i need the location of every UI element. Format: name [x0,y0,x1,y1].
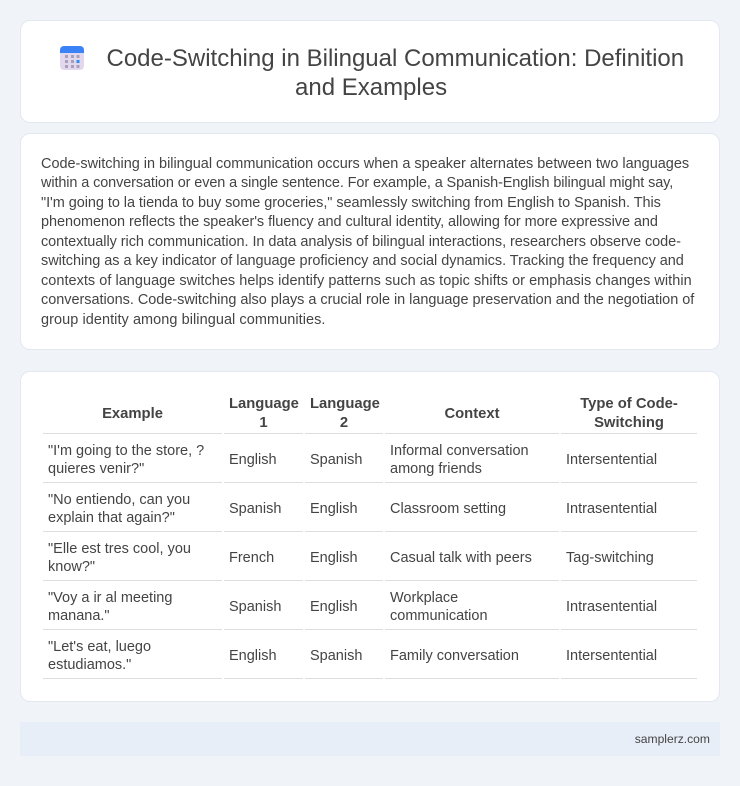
table: code-switching examples: "No entiendo, can you explain that again?" [48,492,190,526]
table: code-switching examples: "Elle est tres cool, you know?" [48,541,191,575]
panel: title card: and Examples [295,74,447,101]
panel: title card [20,20,720,123]
table: code-switching examples: Type of Code-Switching [580,396,678,431]
text block: description: Code-switching in bilingual communication occurs when a speaker alternates between two languages [41,156,689,172]
table: code-switching examples: Tag-switching [566,550,654,566]
text block: description: contextually rich communication. In data analysis of bilingual interactions, researchers observe code- [41,234,681,250]
table: code-switching examples: English [310,501,358,517]
table: code-switching examples: "Voy a ir al meeting manana." [48,590,172,624]
table: code-switching examples: "Let's eat, luego estudiamos." [48,639,151,673]
text block: description: switching as a key indicator of language proficiency and social dynamics. Tracking the frequency and [41,253,684,269]
table: code-switching examples: Spanish [229,599,281,615]
table: code-switching examples: Informal conversation among friends [390,443,529,477]
text block: description: contexts of language switches helps identify patterns such as topic shifts or emphasis changes within [41,272,692,288]
footer: samplerz.com [635,732,710,746]
text block: description: "I'm going to la tienda to buy some groceries," seamlessly switching from English to Spanish. This [41,194,661,210]
title [106,45,684,101]
table: code-switching examples: Workplace communication [390,590,488,624]
table: code-switching examples: Context [444,406,500,422]
table: code-switching examples: Spanish [310,452,362,468]
table: code-switching examples: English [229,452,277,468]
text block: description: phenomenon reflects the speaker's fluency and cultural identity, allowing for more expressive and [41,214,658,230]
table: code-switching examples: Intrasentential [566,599,657,615]
text block: description: group identity among bilingual communities. [41,312,326,328]
table: code-switching examples: English [229,648,277,664]
panel: description [20,133,720,350]
panel: title card: Code-Switching in Bilingual Communication: Definition [106,45,684,72]
table: code-switching examples: Spanish [229,501,281,517]
table: code-switching examples: French [229,550,274,566]
table: code-switching examples: Language 2 [310,396,380,431]
text block: description: conversations. Code-switching also plays a crucial role in language preservation and the negotiation of [41,292,694,308]
table: code-switching examples: "I'm going to the store, ? quieres venir?" [48,443,204,477]
table: code-switching examples: Intrasentential [566,501,657,517]
table: code-switching examples: Family conversation [390,648,519,664]
table: code-switching examples: Casual talk with peers [390,550,532,566]
text block: description: within a conversation or even a single sentence. For example, a Spanish-English bilingual might say, [41,175,673,191]
table: code-switching examples: Spanish [310,648,362,664]
table: code-switching examples: Intersentential [566,452,657,468]
table: code-switching examples: Classroom setting [390,501,506,517]
table: code-switching examples: English [310,550,358,566]
table: code-switching examples: Language 1 [229,396,299,431]
icon: calendar [60,46,84,70]
table: code-switching examples: Example [102,406,163,422]
table: code-switching examples: English [310,599,358,615]
table: code-switching examples: Intersentential [566,648,657,664]
footer [20,722,720,756]
text block: description [41,156,694,328]
table: code-switching examples [43,396,697,679]
panel: table card [20,371,720,702]
